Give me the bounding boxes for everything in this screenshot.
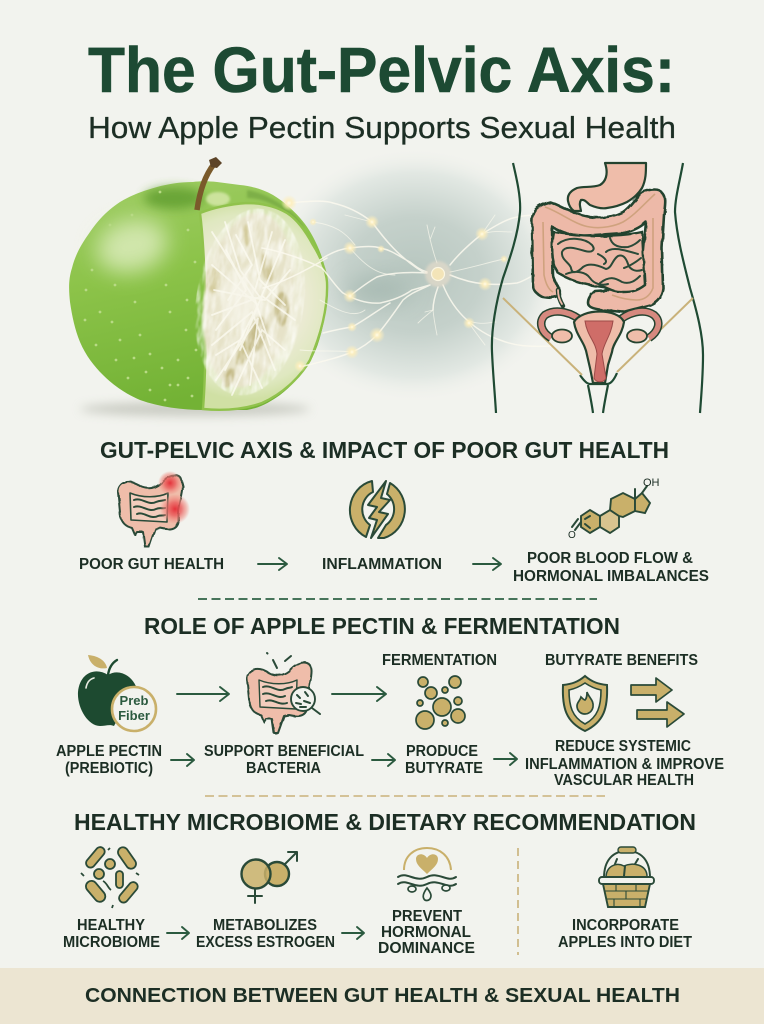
icon: steroid hormone molecule: O <box>568 530 576 541</box>
title: The Gut-Pelvic Axis: <box>88 34 675 106</box>
label line 2: INFLAMMATION & IMPROVE <box>525 756 724 773</box>
apple stem <box>197 164 214 210</box>
label line 3: DOMINANCE <box>378 940 475 957</box>
label: incorporate apples into diet: INCORPORATE <box>572 917 679 934</box>
icon: dark apple with prebiotic fibre badge: Fiber <box>118 708 150 723</box>
appendix <box>558 290 563 306</box>
icon: microbiome bacteria <box>81 845 140 908</box>
icon: gut with magnified bacteria <box>247 653 320 733</box>
hero illustration <box>69 147 703 416</box>
label: reduce systemic inflammation and improve vascular health: REDUCE SYSTEMIC <box>555 738 691 755</box>
section 1 heading: GUT-PELVIC AXIS & IMPACT OF POOR GUT HEALTH <box>100 437 669 463</box>
arrow <box>372 754 395 766</box>
basket of apples icon <box>599 847 654 907</box>
icon: dark apple with prebiotic fibre badge <box>78 655 156 731</box>
glow behind neural network <box>265 147 565 403</box>
icon: dark apple with prebiotic fibre badge: Preb <box>120 693 149 708</box>
label: fermentation: FERMENTATION <box>382 652 497 669</box>
icon: gender symbols estrogen <box>242 852 297 903</box>
label: butyrate benefits: BUTYRATE BENEFITS <box>545 652 698 669</box>
label: inflammation: INFLAMMATION <box>322 556 442 573</box>
label line 2: BACTERIA <box>246 760 321 777</box>
large intestine <box>532 190 665 312</box>
arrow <box>258 558 287 570</box>
icon: green apple cut open <box>69 157 328 416</box>
section 3 heading: HEALTHY MICROBIOME & DIETARY RECOMMENDATION <box>74 809 696 835</box>
section 2 heading: ROLE OF APPLE PECTIN & FERMENTATION <box>144 613 620 639</box>
icon: hormonal balance heart <box>398 848 456 900</box>
section 2 flow <box>56 652 724 789</box>
arrow <box>332 687 386 701</box>
label: support beneficial bacteria: SUPPORT BENEFICIAL <box>204 743 364 760</box>
icon: shield with flame <box>563 676 607 731</box>
label: prevent hormonal dominance: PREVENT <box>392 908 462 925</box>
neural network connection <box>262 195 552 372</box>
arrow <box>171 754 194 766</box>
icon: inflammation bolt <box>350 481 405 538</box>
subtitle: How Apple Pectin Supports Sexual Health <box>88 110 676 145</box>
arrow <box>342 927 364 939</box>
label line 2: (PREBIOTIC) <box>65 760 153 777</box>
anatomy diagram: torso with gut and uterus <box>492 163 703 413</box>
arrow <box>177 687 229 701</box>
section 3 flow <box>63 845 692 957</box>
icon: inflamed gut <box>118 471 190 547</box>
label line 3: VASCULAR HEALTH <box>554 772 694 789</box>
icon: upward benefit arrows <box>631 678 684 727</box>
icon: steroid hormone molecule <box>568 477 660 541</box>
label line 2: MICROBIOME <box>63 934 160 951</box>
icon: fermentation bubbles <box>416 676 465 729</box>
label line 2: APPLES INTO DIET <box>558 934 692 951</box>
apple fibrous flesh <box>183 201 317 403</box>
label: poor blood flow and hormonal imbalances: POOR BLOOD FLOW & <box>527 550 693 567</box>
arrow <box>167 927 189 939</box>
label: apple pectin prebiotic: APPLE PECTIN <box>56 743 162 760</box>
icon: steroid hormone molecule: OH <box>643 477 660 489</box>
label: poor gut health: POOR GUT HEALTH <box>79 556 224 573</box>
pelvic lines <box>503 298 693 375</box>
arrow <box>494 753 517 765</box>
footer banner: CONNECTION BETWEEN GUT HEALTH & SEXUAL HEALTH <box>85 985 680 1007</box>
torso outline <box>492 163 703 413</box>
label: produce butyrate: PRODUCE <box>406 743 478 760</box>
label: healthy microbiome: HEALTHY <box>77 917 145 934</box>
section 1 flow <box>79 471 709 585</box>
small intestine <box>552 232 645 292</box>
label line 2: HORMONAL IMBALANCES <box>513 568 709 585</box>
cut flesh <box>200 203 327 410</box>
glowing sparks <box>281 195 551 372</box>
stomach <box>568 163 646 211</box>
label line 2: BUTYRATE <box>405 760 483 777</box>
arrow <box>473 558 501 570</box>
uterus and ovaries <box>541 312 658 383</box>
label: metabolizes excess estrogen: METABOLIZES <box>213 917 317 934</box>
apple skin speckles <box>85 192 196 400</box>
label line 2: EXCESS ESTROGEN <box>196 934 335 951</box>
footer banner <box>0 968 764 1024</box>
label line 2: HORMONAL <box>381 924 471 941</box>
